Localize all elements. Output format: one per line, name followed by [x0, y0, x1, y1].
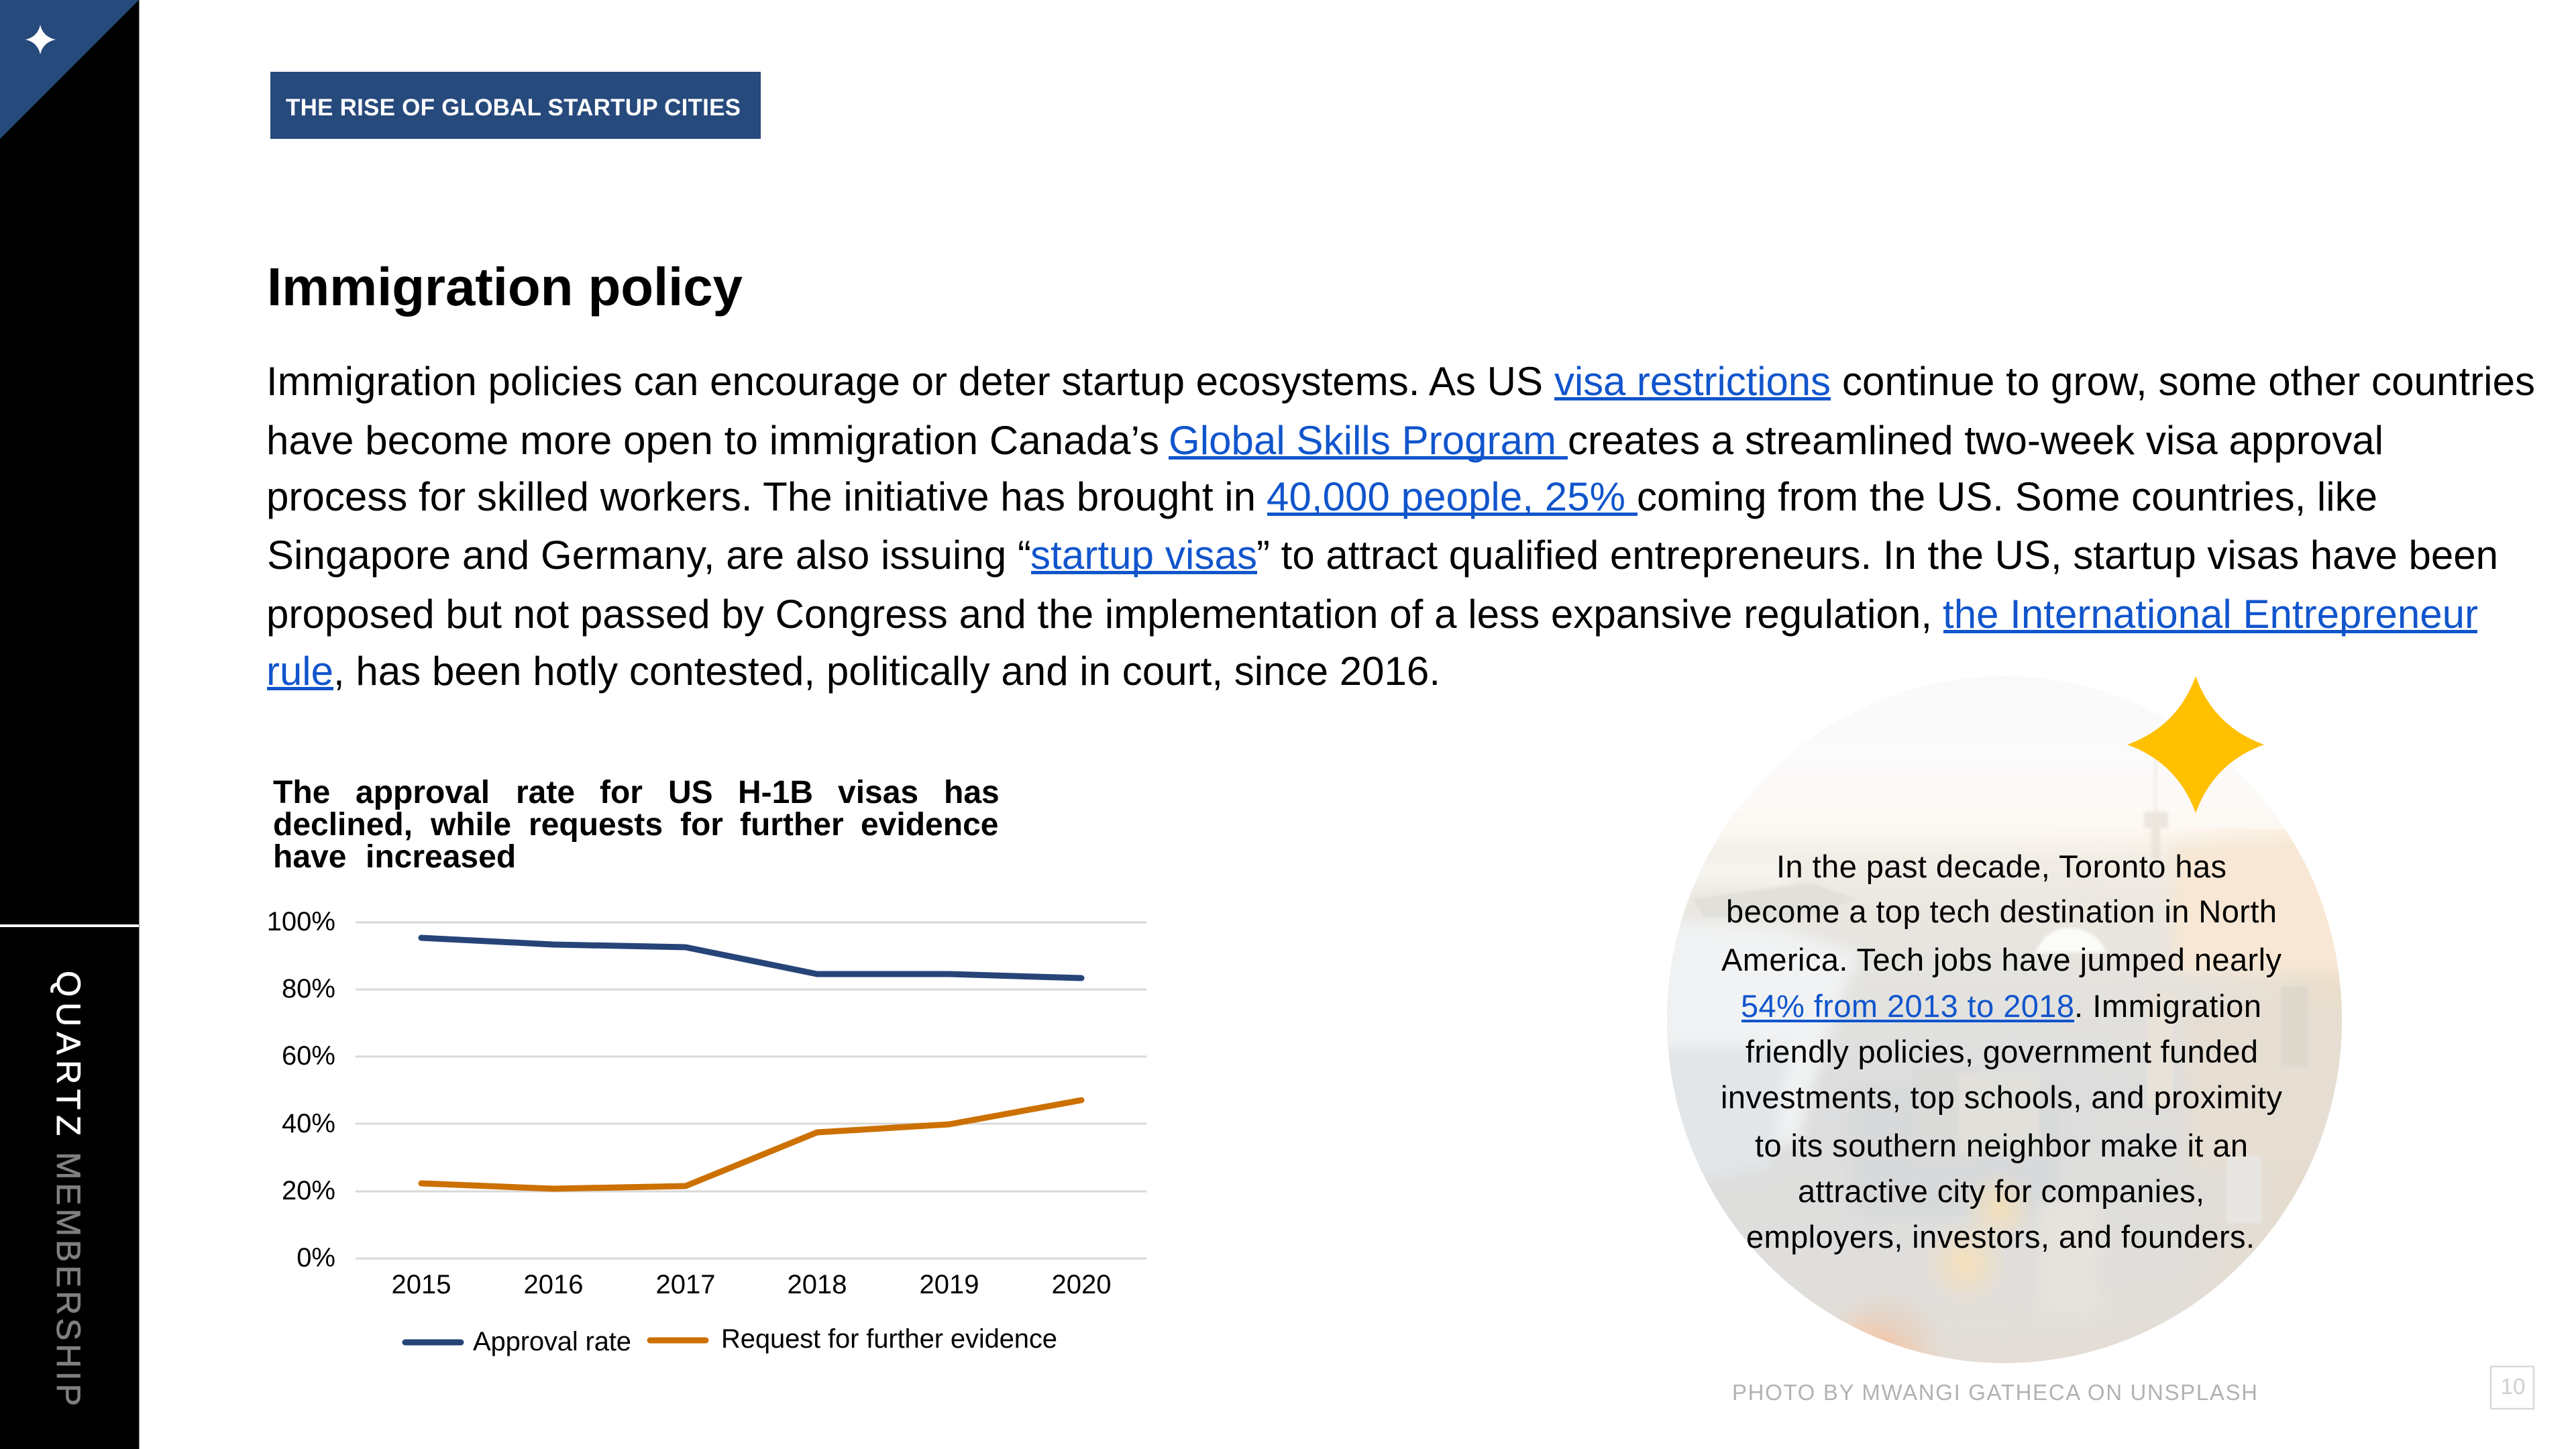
- callout text: become a top tech destination in North: [1726, 894, 2277, 929]
- body text: [266, 359, 2535, 694]
- page number: 10: [2501, 1374, 2525, 1399]
- photo circle: Toronto skyline: [1667, 759, 2342, 1363]
- body text: Global Skills Program: [1169, 418, 1556, 463]
- legend: Approval rate: [473, 1327, 631, 1356]
- body text: proposed but not passed by Congress and the implementation of a less expansive regulation,: [266, 592, 1932, 637]
- body text: Immigration policies can encourage or deter startup ecosystems. As US: [266, 359, 1543, 404]
- body text: continue to grow, some other countries: [1842, 359, 2535, 404]
- chart title: have: [273, 839, 346, 875]
- line chart: [267, 907, 1146, 1356]
- chart title: has: [944, 775, 1000, 810]
- callout text: attractive city for companies,: [1798, 1173, 2204, 1209]
- x axis labels: 2016: [524, 1270, 583, 1299]
- callout text: . Immigration: [2074, 988, 2261, 1024]
- x axis labels: 2019: [920, 1270, 979, 1299]
- y axis labels: 20%: [282, 1176, 335, 1205]
- page number: [2491, 1366, 2534, 1409]
- callout text: America. Tech jobs have jumped nearly: [1721, 942, 2282, 977]
- body text: coming from the US. Some countries, like: [1637, 474, 2377, 519]
- chart title: further: [740, 807, 844, 843]
- chart title: H-1B: [738, 775, 813, 810]
- heading: Immigration policy: [267, 257, 743, 317]
- chart title: rate: [516, 775, 575, 810]
- callout text: to its southern neighbor make it an: [1755, 1128, 2248, 1163]
- x axis labels: 2015: [392, 1270, 451, 1299]
- request for further evidence line: [421, 1100, 1081, 1189]
- approval rate line: [421, 938, 1081, 978]
- chart title: The: [273, 775, 330, 810]
- chart title: for: [680, 807, 723, 843]
- section tag: THE RISE OF GLOBAL STARTUP CITIES: [286, 95, 741, 121]
- x axis labels: 2018: [788, 1270, 847, 1299]
- callout text: 54% from 2013 to 2018: [1741, 988, 2074, 1024]
- chart title: while: [430, 807, 511, 843]
- callout text: In the past decade, Toronto has: [1776, 849, 2226, 884]
- callout text: [1721, 849, 2282, 1254]
- body text: rule: [266, 649, 333, 694]
- callout text: friendly policies, government funded: [1746, 1034, 2258, 1069]
- corner triangle: [0, 0, 139, 139]
- body text: have become more open to immigration Canada’s: [266, 418, 1159, 463]
- chart title: requests: [529, 807, 663, 843]
- body text: startup visas: [1030, 533, 1257, 578]
- y axis labels: [267, 907, 335, 1273]
- sidebar brand label: [50, 971, 87, 1406]
- callout text: investments, top schools, and proximity: [1721, 1079, 2282, 1115]
- body text: visa restrictions: [1554, 359, 1831, 404]
- y axis labels: 60%: [282, 1041, 335, 1071]
- sidebar brand label: MEMBERSHIP: [50, 1152, 87, 1406]
- y axis labels: 0%: [297, 1243, 335, 1273]
- y axis labels: 80%: [282, 974, 335, 1004]
- body text: , has been hotly contested, politically and in court, since 2016.: [333, 649, 1440, 694]
- sidebar: [0, 0, 140, 1449]
- icon: white star: [25, 25, 56, 54]
- section tag: [270, 72, 761, 139]
- x axis labels: 2020: [1052, 1270, 1111, 1299]
- legend: Request for further evidence: [721, 1324, 1057, 1354]
- chart title: US: [668, 775, 713, 810]
- chart title: increased: [366, 839, 516, 875]
- photo credit: PHOTO BY MWANGI GATHECA ON UNSPLASH: [1732, 1380, 2257, 1405]
- y axis labels: 40%: [282, 1109, 335, 1138]
- y axis labels: 100%: [267, 907, 335, 936]
- chart title: approval: [356, 775, 490, 810]
- chart title: visas: [838, 775, 918, 810]
- legend: [405, 1324, 1057, 1356]
- body text: 40,000 people, 25%: [1267, 474, 1625, 519]
- sidebar brand label: QUARTZ: [50, 971, 87, 1136]
- x axis labels: 2017: [656, 1270, 715, 1299]
- body text: creates a streamlined two-week visa approval: [1568, 418, 2383, 463]
- body text: Singapore and Germany, are also issuing “: [267, 533, 1031, 578]
- chart title: for: [600, 775, 643, 810]
- icon: gold star: [2127, 676, 2264, 813]
- callout text: employers, investors, and founders.: [1746, 1219, 2255, 1254]
- body text: ” to attract qualified entrepreneurs. In the US, startup visas have been: [1256, 533, 2498, 578]
- chart title: declined,: [273, 807, 413, 843]
- body text: the International Entrepreneur: [1943, 592, 2478, 637]
- x axis labels: [392, 1270, 1111, 1299]
- body text: process for skilled workers. The initiative has brought in: [266, 474, 1256, 519]
- chart title: evidence: [861, 807, 998, 843]
- chart title: [273, 775, 1000, 875]
